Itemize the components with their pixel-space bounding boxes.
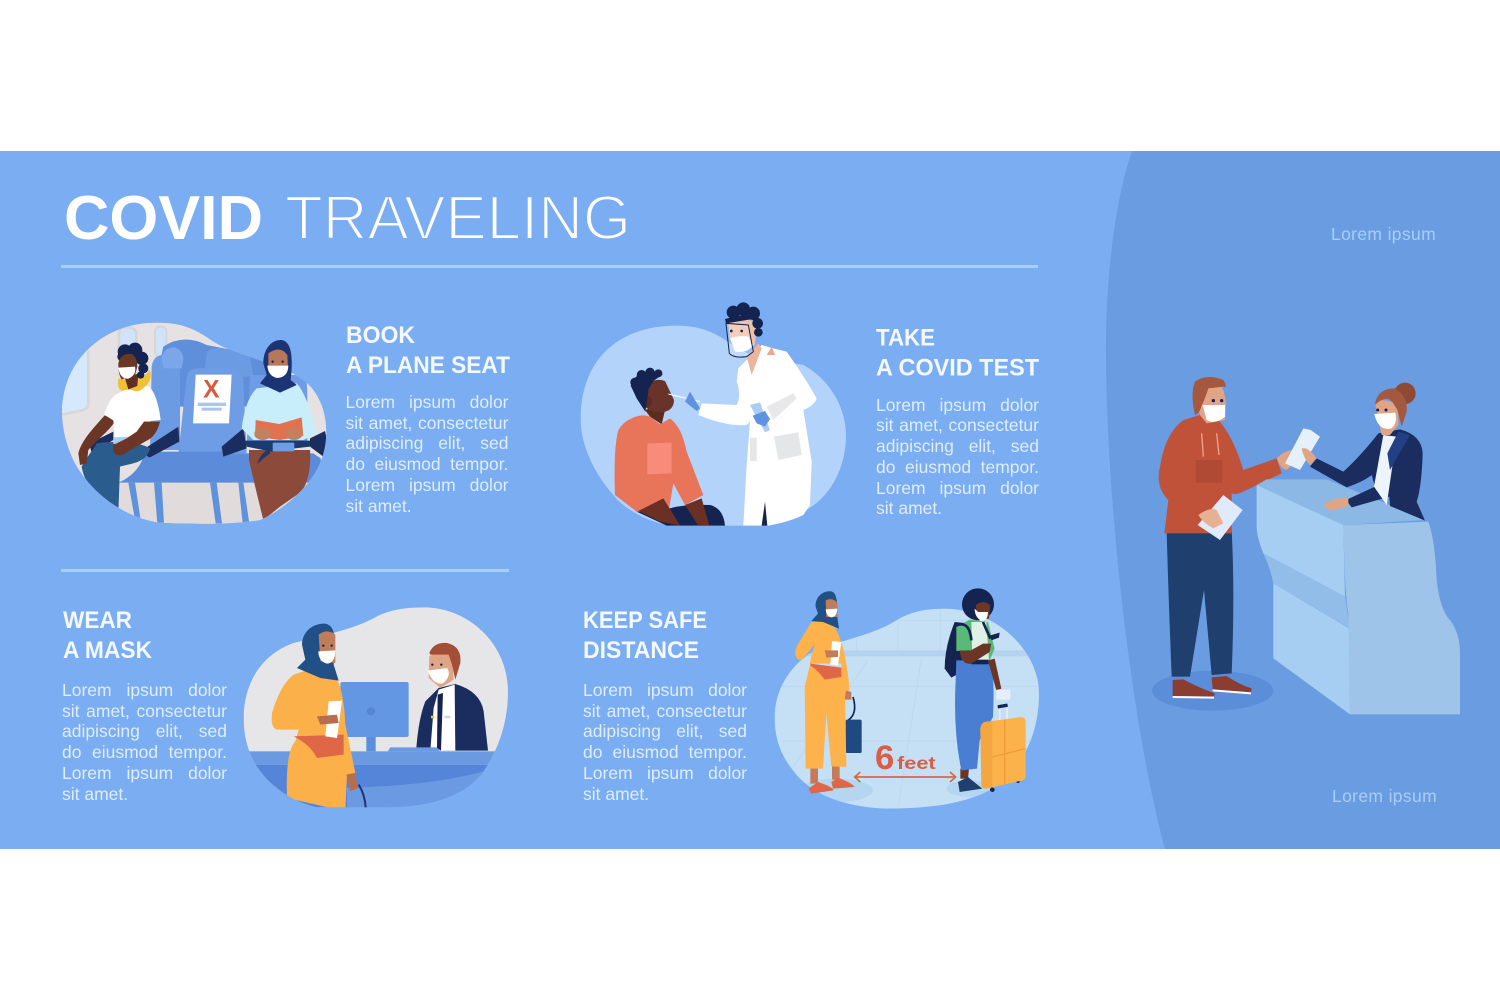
caption: top right: Lorem ipsum (1331, 224, 1436, 244)
passengers (78, 340, 328, 520)
divider (61, 568, 509, 572)
divider (61, 265, 1038, 268)
icon: suitcase (981, 703, 1026, 792)
heading: take a covid test (876, 324, 1039, 382)
right side panel (1106, 151, 1500, 849)
woman with bag (796, 591, 862, 793)
heading: wear a mask: A MASK (63, 637, 153, 664)
text block: keep safe distance: sit amet, consectetur (583, 701, 747, 721)
heading: keep safe distance: DISTANCE (583, 637, 699, 664)
illustration: plane seat (62, 322, 326, 524)
text block: covid test: adipiscing elit, sed (876, 436, 1039, 456)
heading: keep safe distance: KEEP SAFE (583, 607, 707, 634)
text block: covid test: do eiusmod tempor. (876, 457, 1039, 477)
heading: book a plane seat (346, 322, 510, 379)
heading: book a plane seat: BOOK (346, 322, 416, 349)
text block: plane seat: adipiscing elit, sed (346, 433, 508, 453)
text block: covid test: sit amet, consectetur (876, 415, 1039, 435)
illustration: covid test (580, 302, 846, 526)
counter (1257, 479, 1460, 714)
text block: wear a mask (62, 680, 227, 804)
text block: wear a mask: sit amet. (62, 784, 128, 804)
text block: plane seat: sit amet, consectetur (346, 413, 508, 433)
text block: covid test: sit amet. (876, 498, 942, 518)
text block: wear a mask: Lorem ipsum dolor (62, 763, 227, 783)
label: 6 feet: feet (897, 753, 936, 773)
woman with luggage (945, 588, 1011, 792)
illustration: wear a mask (244, 608, 508, 808)
caption: bottom right: Lorem ipsum (1332, 786, 1437, 806)
text block: covid test (876, 395, 1039, 518)
text block: plane seat: Lorem ipsum dolor (346, 392, 508, 412)
text block: keep safe distance: adipiscing elit, sed (583, 721, 747, 741)
text block: plane seat (346, 392, 508, 516)
text block: plane seat: do eiusmod tempor. (346, 454, 508, 474)
text block: keep safe distance: sit amet. (583, 784, 649, 804)
heading: book a plane seat: A PLANE SEAT (346, 352, 510, 379)
text block: plane seat: sit amet. (346, 496, 412, 516)
illustration: safe distance (774, 588, 1039, 808)
text block: wear a mask: do eiusmod tempor. (62, 742, 227, 762)
text block: keep safe distance: Lorem ipsum dolor (583, 680, 747, 700)
heading: wear a mask: WEAR (63, 607, 132, 634)
text block: wear a mask: sit amet, consectetur (62, 701, 227, 721)
text block: wear a mask: Lorem ipsum dolor (62, 680, 227, 700)
text block: keep safe distance: Lorem ipsum dolor (583, 763, 747, 783)
background panel (0, 151, 1500, 849)
text block: wear a mask: adipiscing elit, sed (62, 721, 227, 741)
heading: keep safe distance (583, 607, 707, 664)
agent (1310, 383, 1425, 521)
traveler (1159, 377, 1300, 699)
text block: plane seat: Lorem ipsum dolor (346, 475, 508, 495)
tickets (1285, 428, 1320, 470)
woman with tickets (271, 624, 366, 812)
arrow: distance (855, 772, 956, 782)
heading: take a covid test: A COVID TEST (876, 354, 1039, 382)
seat sign (193, 375, 232, 423)
heading: take a covid test: TAKE (876, 324, 935, 352)
text block: covid test: Lorem ipsum dolor (876, 478, 1039, 498)
heading: wear a mask (63, 607, 153, 664)
text block: keep safe distance: do eiusmod tempor. (583, 742, 747, 762)
text block: keep safe distance (583, 680, 747, 804)
patient (615, 368, 725, 526)
text block: covid test: Lorem ipsum dolor (876, 395, 1039, 415)
label: 6 feet: 6 (875, 739, 895, 777)
illustration: check-in counter (1152, 377, 1460, 714)
seat sign: X (203, 376, 220, 403)
title (64, 185, 631, 247)
doctor (668, 302, 817, 526)
label: 6 feet (875, 739, 936, 777)
